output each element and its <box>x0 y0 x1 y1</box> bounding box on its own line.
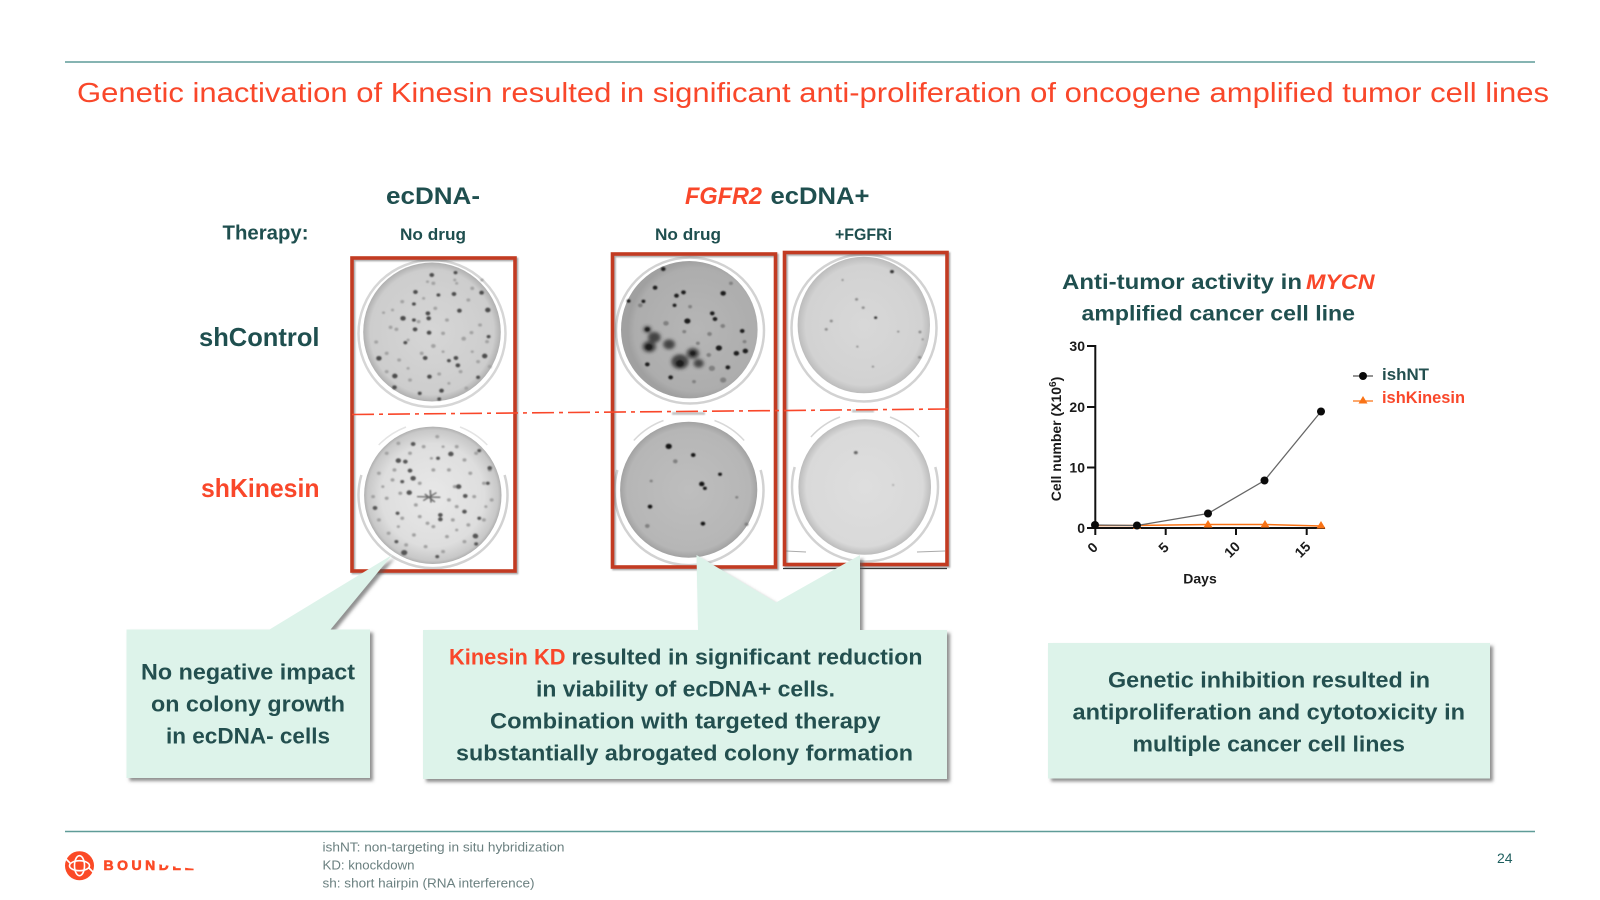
dish: ecDNA+ shControl FGFRi <box>792 254 936 402</box>
footnotes <box>322 840 564 890</box>
column label: FGFRi: +FGFRi <box>835 225 892 244</box>
dish: ecDNA+ shControl no drug <box>616 258 764 404</box>
line chart: 5 <box>1155 539 1172 556</box>
logo: BOUNDLESS <box>104 857 220 873</box>
callout: genetic inhibition: Genetic inhibition resulted in <box>1108 668 1430 692</box>
page number: 24 <box>1497 850 1513 866</box>
chart heading: amplified cancer cell line <box>1082 302 1355 326</box>
label: therapy: Therapy: <box>222 222 308 244</box>
callout: ecDNA+: substantially abrogated colony formation <box>456 740 913 766</box>
callout: ecDNA+ <box>423 555 947 779</box>
bottom rule <box>65 830 1535 832</box>
callout: ecDNA-: No negative impact <box>141 660 356 684</box>
legend <box>1353 365 1465 407</box>
chart heading: MYCN <box>1306 270 1375 294</box>
line chart: Cell number (X10 <box>1048 387 1064 501</box>
series: ishKinesin <box>1095 520 1326 529</box>
line chart: 0 <box>1077 520 1085 536</box>
dish: ecDNA+ shKinesin no drug <box>614 412 764 565</box>
callout: ecDNA+: Combination with targeted therapy <box>490 708 881 734</box>
heading: FGFR2 ecDNA+ <box>685 183 870 210</box>
legend: ishNT <box>1382 365 1430 384</box>
dish: ecDNA- shControl <box>358 260 506 407</box>
red box: ecDNA+ no drug <box>612 254 776 567</box>
footnotes: ishNT: non-targeting in situ hybridization <box>322 840 564 854</box>
callout: genetic inhibition: antiproliferation and cytotoxicity in <box>1072 700 1465 724</box>
callout: ecDNA-: in ecDNA- cells <box>166 724 330 748</box>
callout: genetic inhibition <box>1048 643 1490 778</box>
top rule <box>65 61 1535 63</box>
red box: ecDNA+ FGFRi <box>784 252 947 564</box>
callout: ecDNA- <box>126 555 392 778</box>
chart heading <box>1062 270 1375 326</box>
heading: FGFR2 ecDNA+: ecDNA+ <box>770 183 870 210</box>
legend: ishKinesin <box>1382 388 1465 407</box>
line chart: 0 <box>1084 539 1101 556</box>
line chart <box>1048 338 1326 586</box>
footnotes: sh: short hairpin (RNA interference) <box>322 876 534 890</box>
title: Genetic inactivation of Kinesin resulted in significant anti-proliferation of oncogene amplified tumor cell lines <box>77 77 1549 108</box>
line chart: 30 <box>1069 338 1085 354</box>
chart heading: Anti-tumor activity in <box>1062 270 1302 294</box>
line chart: 20 <box>1069 399 1085 415</box>
heading: FGFR2 ecDNA+: FGFR2 <box>685 183 763 210</box>
line chart: 10 <box>1069 460 1085 476</box>
logo <box>65 851 194 880</box>
line chart: 6 <box>1048 381 1059 387</box>
line chart: Days <box>1183 570 1217 586</box>
red box: ecDNA- <box>352 258 515 571</box>
callout: ecDNA-: on colony growth <box>151 692 345 716</box>
heading: ecDNA-: ecDNA- <box>386 183 480 210</box>
column label: no drug ecDNA-: No drug <box>400 225 466 244</box>
series: ishNT <box>1091 408 1325 530</box>
callout: genetic inhibition: multiple cancer cell lines <box>1132 732 1405 756</box>
footnotes: KD: knockdown <box>322 858 414 872</box>
dish: ecDNA- shKinesin <box>358 427 508 568</box>
callout: ecDNA+: resulted in significant reduction <box>572 644 922 670</box>
callout: ecDNA+: in viability of ecDNA+ cells. <box>536 676 835 702</box>
dash-dot divider <box>352 409 948 414</box>
column label: no drug ecDNA+: No drug <box>655 225 721 244</box>
line chart: 15 <box>1291 538 1314 561</box>
row label: shControl: shControl <box>199 322 320 352</box>
line chart: 10 <box>1221 538 1243 561</box>
line chart: ) <box>1048 377 1064 381</box>
dish: ecDNA+ shKinesin FGFRi <box>783 410 947 568</box>
callout: ecDNA+: Kinesin KD <box>449 644 566 670</box>
row label: shKinesin: shKinesin <box>201 473 320 503</box>
